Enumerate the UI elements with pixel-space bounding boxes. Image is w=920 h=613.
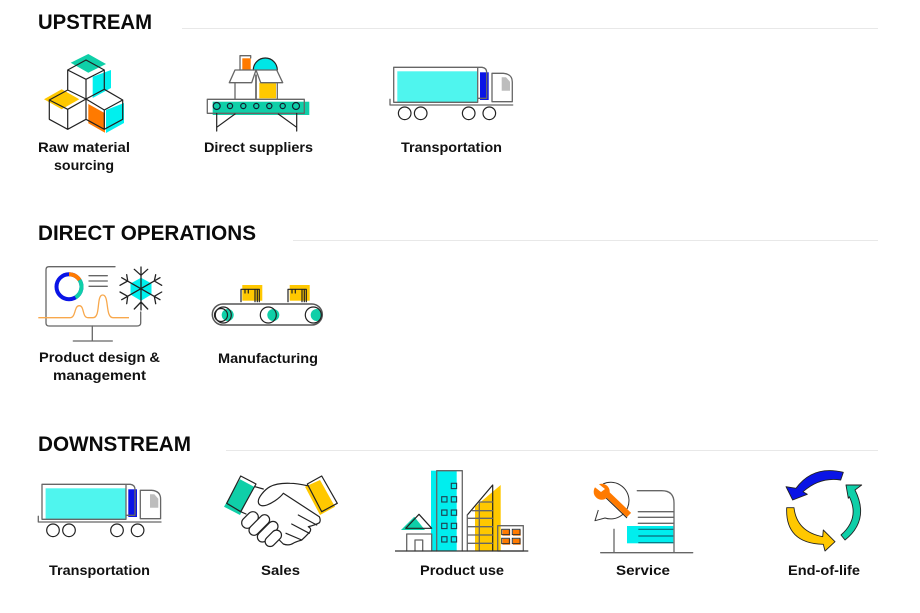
arrow: teal <box>841 485 862 540</box>
icon: monitor with chart and snowflake <box>38 267 162 341</box>
panel: upstream <box>38 11 878 173</box>
icon: recycling arrows <box>786 471 862 551</box>
label: product use: Product use <box>420 562 504 578</box>
icon: buildings <box>395 471 528 551</box>
label: transportation downstream: Transportation <box>49 562 150 578</box>
icon: service wrench and document <box>594 482 693 553</box>
label: product design and management: management <box>53 367 146 383</box>
label: product design and management: Product design & <box>39 349 160 365</box>
label: product design and management <box>39 349 160 383</box>
label: sales: Sales <box>261 562 300 578</box>
panel: direct operations <box>38 222 878 383</box>
label: raw material sourcing <box>38 139 130 173</box>
panel: downstream <box>38 433 878 578</box>
label: direct suppliers: Direct suppliers <box>204 139 313 155</box>
icon: truck downstream <box>38 484 161 537</box>
label: raw material sourcing: Raw material <box>38 139 130 155</box>
icon: handshake <box>224 476 337 549</box>
heading: upstream: UPSTREAM <box>38 11 152 34</box>
heading: downstream: DOWNSTREAM <box>38 433 191 456</box>
label: transportation upstream: Transportation <box>401 139 502 155</box>
label: manufacturing: Manufacturing <box>218 350 318 366</box>
icon: manufacturing conveyor <box>212 285 323 325</box>
arrow: blue <box>786 471 843 500</box>
icon: cubes <box>44 54 124 133</box>
heading: direct operations: DIRECT OPERATIONS <box>38 222 256 245</box>
label: raw material sourcing: sourcing <box>54 157 114 173</box>
icon: direct suppliers conveyor <box>207 56 309 131</box>
label: service: Service <box>616 562 670 578</box>
arrow: yellow <box>787 508 835 551</box>
label: end-of-life: End-of-life <box>788 562 860 578</box>
icon: truck upstream <box>390 67 513 120</box>
